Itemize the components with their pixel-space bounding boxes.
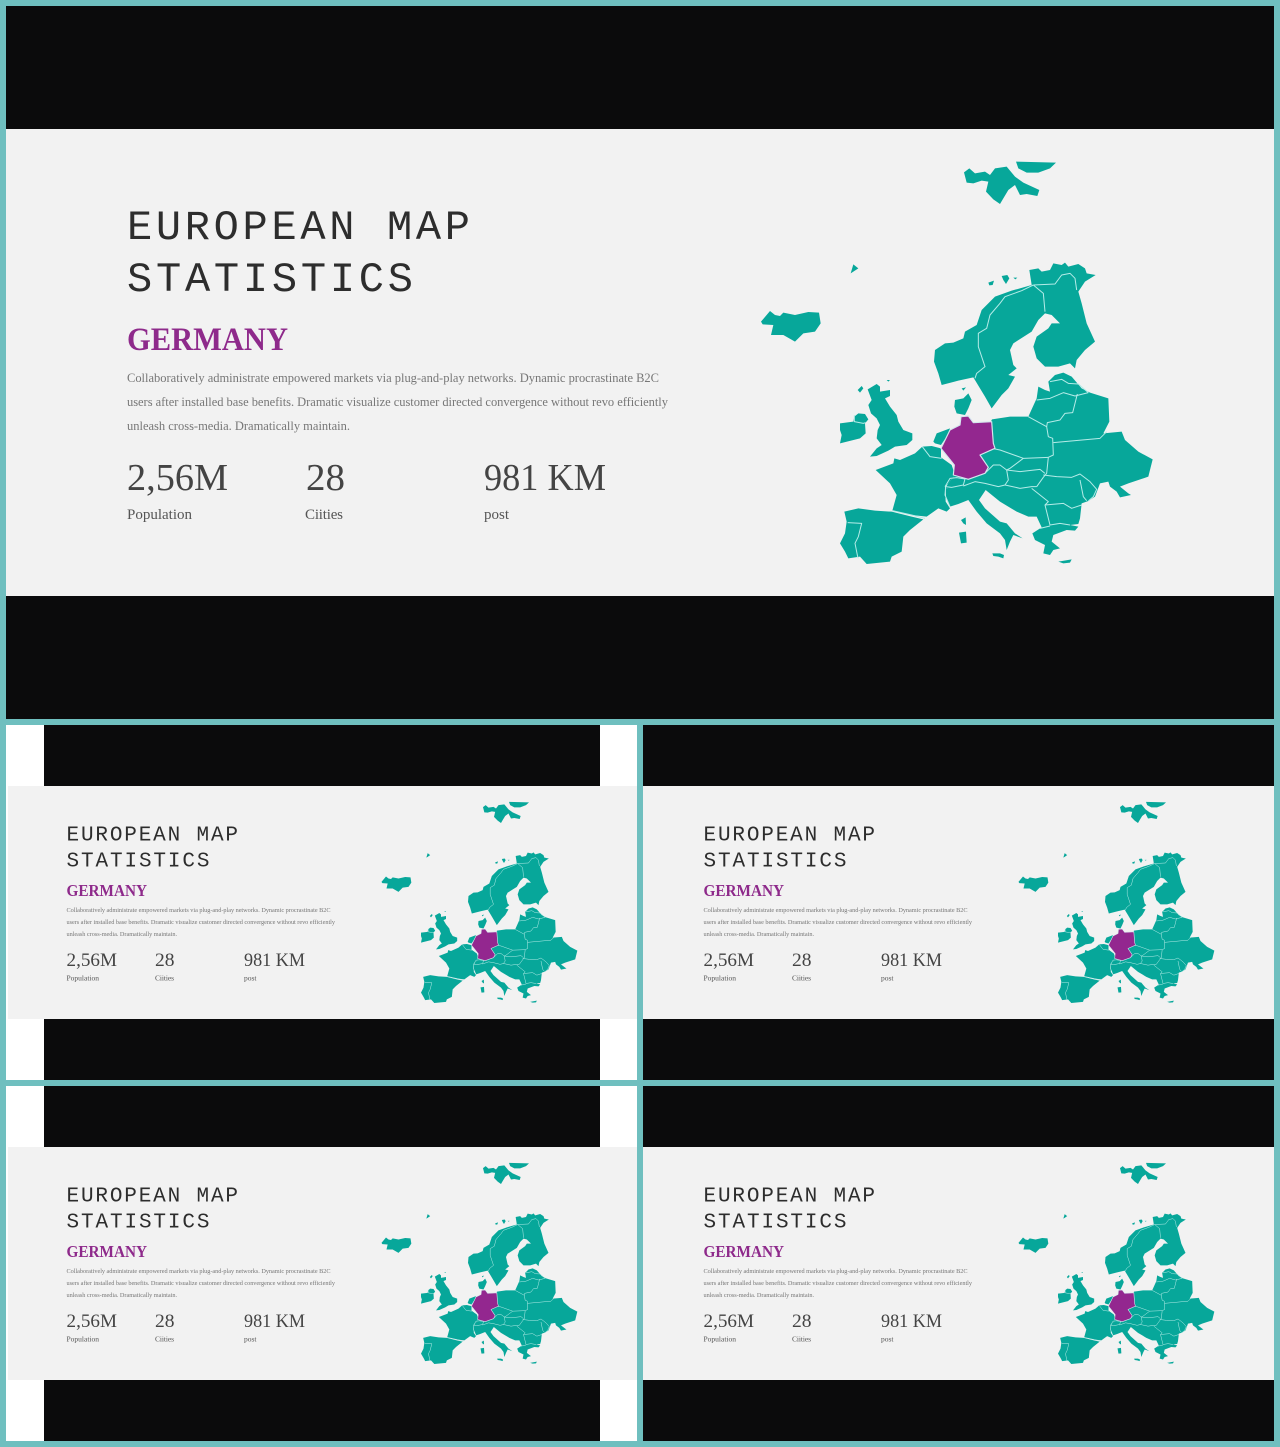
stat: post: post	[881, 974, 894, 982]
top black band	[44, 1086, 600, 1147]
body text: unleash cross-media. Dramatically maintain.	[704, 1292, 814, 1299]
title	[127, 204, 470, 304]
stat: population: 2,56M	[704, 950, 754, 971]
country heading: GERMANY	[704, 1242, 784, 1261]
body text: unleash cross-media. Dramatically maintain.	[127, 419, 350, 433]
stat: cities: 28	[155, 950, 174, 971]
title: STATISTICS	[704, 1212, 846, 1234]
title: EUROPEAN MAP	[66, 1186, 238, 1208]
title: STATISTICS	[127, 256, 413, 304]
bottom black band	[44, 1019, 600, 1080]
map of Europe	[381, 1163, 577, 1364]
stat: post: 981 KM	[484, 457, 606, 499]
grey content band	[643, 786, 1274, 1019]
stat: cities	[155, 1311, 174, 1344]
Germany highlighted	[941, 416, 995, 479]
stat: post: 981 KM	[881, 950, 942, 971]
body text: Collaboratively administrate empowered markets via plug-and-play networks. Dynamic procrastinate B2C	[66, 1268, 330, 1275]
stat: cities: Ciities	[155, 974, 174, 982]
grey content band	[8, 786, 637, 1019]
bottom black band	[44, 1380, 600, 1441]
top black band	[643, 725, 1274, 786]
stat: population: 2,56M	[704, 1311, 754, 1332]
map of Europe	[1018, 802, 1214, 1003]
map of Europe with Germany highlighted	[761, 162, 1153, 564]
title: EUROPEAN MAP	[66, 824, 238, 848]
stat: population	[66, 1311, 117, 1344]
stat: population	[127, 457, 228, 523]
stat: cities: Ciities	[305, 507, 343, 523]
stat: population: Population	[66, 1334, 99, 1344]
Scandinavia	[934, 263, 1096, 408]
stat: post: post	[881, 1334, 894, 1344]
body text: Collaboratively administrate empowered markets via plug-and-play networks. Dynamic procrastinate B2C	[66, 907, 330, 914]
grey content band	[8, 1147, 637, 1380]
stat: cities: 28	[155, 1311, 174, 1332]
stat: population: Population	[704, 974, 736, 982]
panel: main slide	[6, 6, 1274, 719]
stat: population: 2,56M	[66, 1311, 117, 1332]
body text	[66, 1268, 336, 1299]
title	[66, 1186, 238, 1234]
title: STATISTICS	[66, 850, 210, 874]
body text: users after installed base benefits. Dramatic visualize customer directed convergence without revo efficiently	[66, 919, 336, 926]
body text: users after installed base benefits. Dramatic visualize customer directed convergence without revo efficiently	[66, 1280, 336, 1287]
stat: population: Population	[127, 507, 192, 523]
top black band	[643, 1086, 1274, 1147]
stat: population: 2,56M	[127, 457, 228, 499]
stat: cities: Ciities	[792, 974, 811, 982]
panel: small slide bottom left	[6, 1086, 637, 1441]
stat: cities	[155, 950, 174, 982]
stat: post: 981 KM	[881, 1311, 942, 1332]
body text	[66, 907, 336, 938]
stat: cities: 28	[792, 1311, 812, 1332]
slide text	[66, 824, 336, 982]
body text	[704, 907, 973, 938]
bottom black band	[643, 1019, 1274, 1080]
stat: post	[881, 1311, 942, 1344]
slide text	[704, 1186, 973, 1344]
stat: cities: 28	[306, 457, 345, 499]
Arctic islands and Iceland	[761, 162, 1056, 342]
map of Europe	[1018, 1163, 1214, 1364]
stat: post	[484, 457, 606, 523]
title: STATISTICS	[704, 850, 846, 874]
white side background	[6, 1086, 637, 1441]
slide text	[704, 824, 973, 982]
body text: users after installed base benefits. Dramatic visualize customer directed convergence without revo efficiently	[704, 919, 973, 926]
body text: users after installed base benefits. Dramatic visualize customer directed convergence without revo efficiently	[127, 395, 669, 409]
map of Europe	[381, 802, 577, 1003]
white side background	[6, 725, 637, 1080]
body text	[704, 1268, 973, 1299]
bottom black band	[6, 596, 1274, 719]
western Europe	[840, 380, 1023, 564]
stat: cities: 28	[792, 950, 812, 971]
title: STATISTICS	[66, 1212, 210, 1234]
stat: post: 981 KM	[244, 1311, 305, 1332]
country heading: GERMANY	[66, 881, 147, 900]
panel: small slide bottom right	[643, 1086, 1274, 1441]
stat: cities: Ciities	[792, 1334, 811, 1344]
body text: users after installed base benefits. Dramatic visualize customer directed convergence without revo efficiently	[704, 1280, 973, 1287]
panel: small slide top left	[6, 725, 637, 1080]
body text: Collaboratively administrate empowered markets via plug-and-play networks. Dynamic procrastinate B2C	[704, 907, 968, 914]
stat: post: post	[244, 974, 257, 982]
body text: unleash cross-media. Dramatically maintain.	[66, 931, 177, 938]
grey content band	[6, 129, 1274, 596]
stat: population: Population	[66, 974, 99, 982]
stat: population	[704, 950, 754, 982]
body text: Collaboratively administrate empowered markets via plug-and-play networks. Dynamic procrastinate B2C	[127, 371, 659, 385]
stat: cities: Ciities	[155, 1334, 174, 1344]
stat: post	[244, 950, 305, 982]
title: EUROPEAN MAP	[704, 824, 875, 848]
stat: post	[244, 1311, 305, 1344]
country heading: GERMANY	[66, 1242, 147, 1261]
title	[704, 824, 875, 874]
slide text	[66, 1186, 336, 1344]
top black band	[6, 6, 1274, 129]
bottom black band	[643, 1380, 1274, 1441]
stat: post: 981 KM	[244, 950, 305, 971]
stat: post: post	[244, 1334, 257, 1344]
body text: unleash cross-media. Dramatically maintain.	[66, 1292, 177, 1299]
stat: population: Population	[704, 1334, 736, 1344]
panel: small slide top right	[643, 725, 1274, 1080]
title: EUROPEAN MAP	[704, 1186, 875, 1208]
stat: post	[881, 950, 942, 982]
stat: cities	[305, 457, 345, 523]
grey content band	[643, 1147, 1274, 1380]
country heading: GERMANY	[704, 881, 784, 900]
title	[704, 1186, 875, 1234]
body text	[127, 371, 669, 433]
country heading: GERMANY	[127, 322, 288, 358]
stat: post: post	[484, 507, 510, 523]
stat: population	[66, 950, 117, 982]
body text: unleash cross-media. Dramatically maintain.	[704, 931, 814, 938]
top black band	[44, 725, 600, 786]
stat: population: 2,56M	[66, 950, 117, 971]
title	[66, 824, 238, 874]
body text: Collaboratively administrate empowered markets via plug-and-play networks. Dynamic procrastinate B2C	[704, 1268, 968, 1275]
stat: population	[704, 1311, 754, 1344]
title: EUROPEAN MAP	[127, 204, 470, 252]
stat: cities	[792, 950, 812, 982]
stat: cities	[792, 1311, 812, 1344]
central and eastern Europe	[963, 373, 1153, 563]
